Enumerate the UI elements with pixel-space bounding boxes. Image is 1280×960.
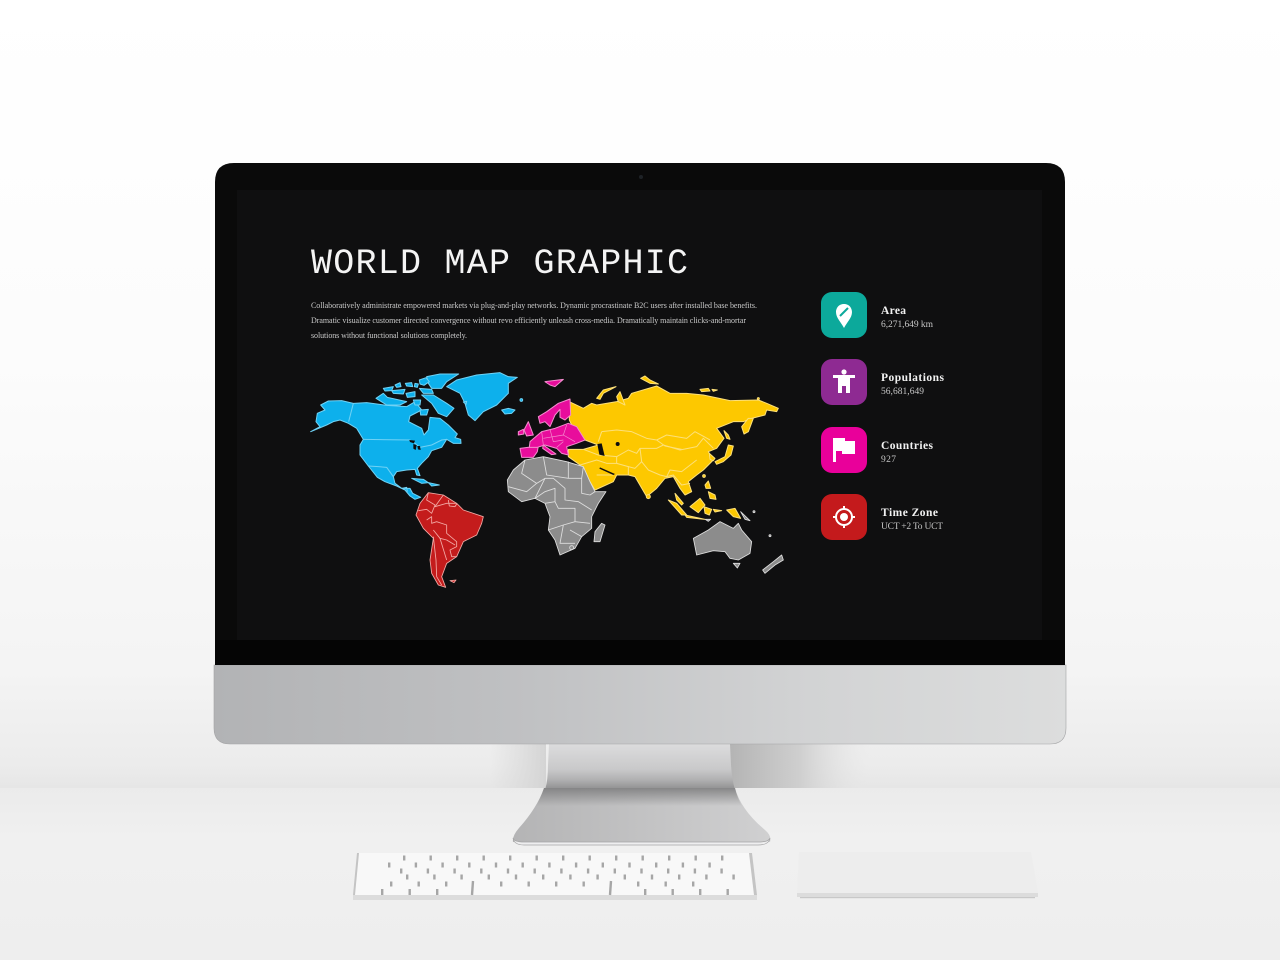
stat: Populations: Populations bbox=[881, 372, 945, 384]
world map: eastern part bbox=[507, 376, 783, 573]
trackpad bbox=[797, 852, 1038, 898]
icon: target bbox=[821, 494, 867, 540]
icon: map pin bbox=[821, 292, 867, 338]
Caspian, Aral, Gulf bbox=[597, 442, 620, 475]
Australia and Oceania bbox=[693, 511, 783, 573]
lower bezel band bbox=[215, 640, 1065, 665]
stat: Countries bbox=[821, 427, 934, 473]
South America bbox=[416, 493, 483, 587]
monitor stand bbox=[513, 744, 770, 845]
camera bbox=[639, 175, 643, 179]
icon: person bbox=[821, 359, 867, 405]
stat: Area: 6,271,649 km bbox=[881, 320, 934, 330]
title: WORLD MAP GRAPHIC bbox=[311, 244, 688, 284]
background: desk bbox=[0, 788, 1280, 960]
Africa bbox=[507, 457, 606, 555]
icon: flag bbox=[821, 427, 867, 473]
North America bbox=[311, 373, 523, 499]
stat: Countries: 927 bbox=[881, 455, 896, 465]
Europe bbox=[518, 379, 585, 457]
monitor bbox=[214, 163, 1066, 744]
body text: Collaboratively administrate empowered markets via plug-and-play networks. Dynamic procrastinate B2C users after installed base benefits. bbox=[311, 301, 757, 310]
monitor chin bbox=[214, 665, 1066, 744]
stat: Area: Area bbox=[881, 305, 906, 317]
keyboard bbox=[353, 853, 757, 900]
stat: Populations: 56,681,649 bbox=[881, 387, 924, 397]
Asia bbox=[568, 376, 778, 519]
body text bbox=[311, 301, 757, 340]
body text: Dramatic visualize customer directed convergence without revo efficiently unleash cross-media. Dramatically maintain clicks-and-mortar bbox=[311, 316, 746, 325]
stat: Time Zone: Time Zone bbox=[881, 507, 938, 519]
body text: solutions without functional solutions completely. bbox=[311, 331, 467, 340]
Great Lakes bbox=[409, 440, 421, 450]
stat: Populations bbox=[821, 359, 945, 405]
monitor bezel bbox=[215, 163, 1065, 665]
stat: Area bbox=[821, 292, 934, 338]
stat: Countries: Countries bbox=[881, 440, 934, 452]
stat: Time Zone bbox=[821, 494, 943, 540]
stand shadow on wall bbox=[490, 744, 870, 788]
stat: Time Zone: UCT +2 To UCT bbox=[881, 522, 943, 532]
world map: western part bbox=[311, 373, 523, 587]
screen bbox=[237, 190, 1042, 640]
